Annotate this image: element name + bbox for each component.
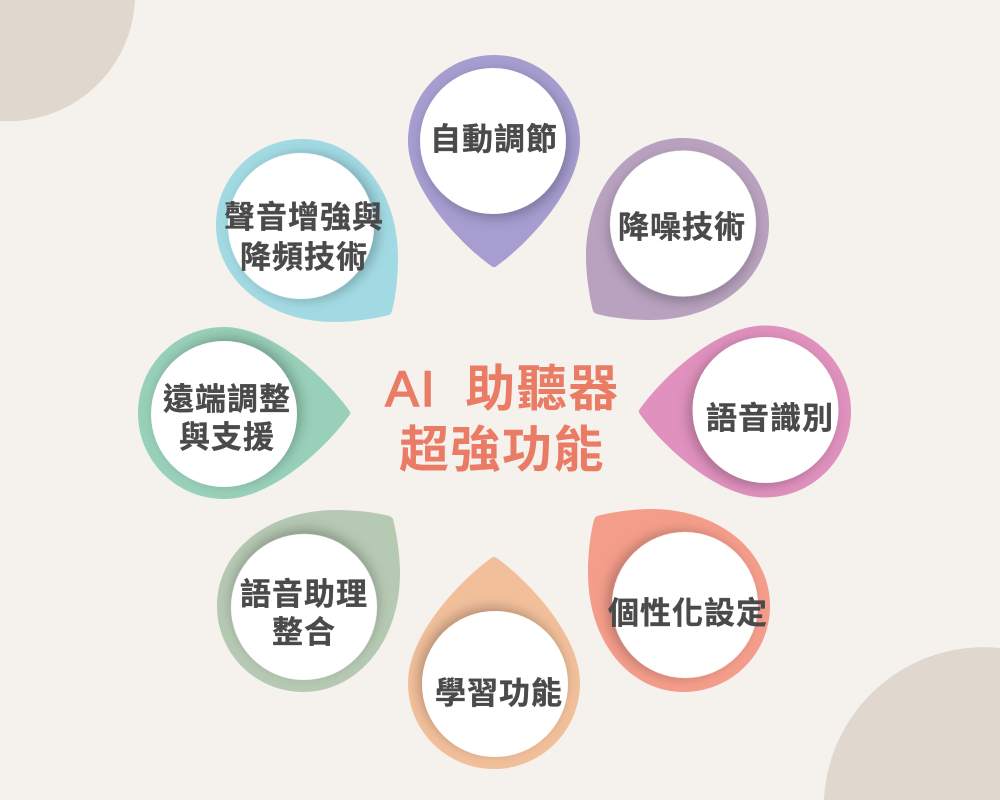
- drop: 聲音增強與降頻技術: [198, 123, 404, 329]
- title: 助聽器: [465, 361, 620, 417]
- drop: 語音助理整合: [201, 504, 407, 710]
- drop: 語音助理整合: 語音助理: [240, 577, 368, 612]
- drop: 自動調節: [408, 55, 580, 267]
- drop: 聲音增強與降頻技術: 降頻技術: [240, 240, 368, 275]
- drop: 聲音增強與降頻技術: 聲音增強與: [224, 200, 384, 235]
- drop: 降噪技術: [580, 120, 786, 327]
- drop: 個性化設定: [582, 502, 788, 708]
- decorative corner circle: top left: [0, 0, 135, 121]
- drop: 語音助理整合: 整合: [272, 615, 336, 650]
- drop: 降噪技術: 降噪技術: [618, 210, 746, 245]
- drop: 語音識別: [639, 326, 851, 498]
- drop: 遠端調整與支援: 與支援: [179, 420, 275, 455]
- drop: 個性化設定: 個性化設定: [608, 596, 768, 631]
- drop: 遠端調整與支援: [138, 327, 350, 499]
- title: AI: [385, 361, 437, 417]
- drop: 學習功能: 學習功能: [435, 676, 563, 711]
- title: 超強功能: [399, 422, 605, 478]
- title: [385, 361, 620, 478]
- decorative corner circle: bottom right: [824, 647, 1000, 800]
- drop: 語音識別: 語音識別: [706, 401, 834, 436]
- drop: 自動調節: 自動調節: [430, 122, 558, 157]
- drop: 遠端調整與支援: 遠端調整: [163, 382, 291, 417]
- drop: 學習功能: [408, 557, 580, 769]
